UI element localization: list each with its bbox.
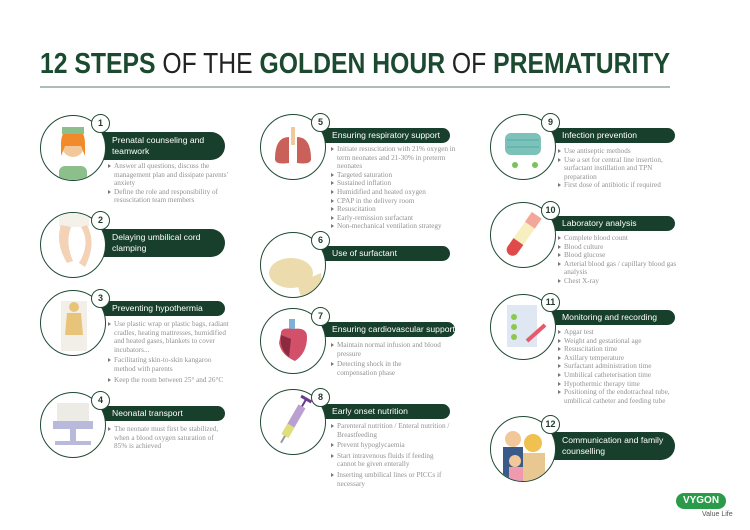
bullets 11: Surfactant administration time [564, 362, 651, 370]
bullets 9: Use antiseptic methods [564, 147, 631, 155]
badge 3: 3 [98, 293, 103, 303]
logo: VYGON [683, 495, 719, 506]
step 9 [490, 113, 675, 189]
bullets 5: CPAP in the delivery room [337, 197, 414, 205]
bullets 3: Facilitating skin-to-skin kangaroo method with parents [114, 356, 211, 373]
step 4 [40, 391, 225, 458]
icon: syringe [260, 389, 326, 455]
pill 8: Early onset nutrition [332, 406, 408, 416]
pill 2 [100, 229, 225, 257]
pill 4: Neonatal transport [112, 408, 183, 418]
badge 4: 4 [98, 395, 103, 405]
badge 6: 6 [318, 235, 323, 245]
badge 6 [311, 231, 330, 250]
step 10 [490, 201, 676, 285]
pill 9: Infection prevention [562, 130, 637, 140]
bullets 5: Early-remission surfactant [337, 214, 413, 222]
bullets 8: Inserting umbilical lines or PICCs if necessary [337, 471, 441, 488]
icon: baby in bag [40, 290, 106, 356]
icon: baby legs [40, 212, 106, 278]
logo [676, 493, 733, 518]
badge 7: 7 [318, 311, 323, 321]
bullets 7: Detecting shock in the compensation phase [337, 360, 401, 377]
step 1 [40, 114, 228, 204]
icon: mask [490, 114, 556, 180]
badge 10 [541, 201, 560, 220]
badge 3 [91, 289, 110, 308]
icon: incubator [40, 392, 106, 458]
badge 1: 1 [98, 118, 103, 128]
step 2 [40, 211, 225, 278]
badge 12: 12 [545, 419, 556, 429]
bullets 11: Umbilical catheterisation time [564, 371, 651, 379]
badge 12 [541, 415, 560, 434]
bullets 1: Define the role and responsibility of resuscitation team members [114, 188, 218, 204]
bullets 5: Sustained inflation [337, 179, 391, 187]
badge 9 [541, 113, 560, 132]
step 5 [260, 113, 456, 230]
logo: Value Life [702, 511, 733, 518]
bullets 8: Start intravenous fluids if feeding cannot be given enterally [337, 452, 434, 468]
icon: lungs [260, 114, 326, 180]
pill 4 [100, 406, 225, 421]
pill 1: Prenatal counseling and teamwork [112, 135, 204, 156]
step 7 [260, 307, 455, 377]
bullets 11: Apgar test [564, 328, 594, 336]
icon: blood tube [490, 202, 556, 268]
pill 12 [550, 432, 675, 460]
bullets 5: Initiate resuscitation with 21% oxygen in term neonates and 21-30% in preterm neonates [337, 145, 455, 170]
bullets 9 [558, 147, 663, 189]
bullets 5: Targeted saturation [337, 171, 392, 179]
bullets 7 [331, 341, 441, 377]
step 8 [260, 388, 450, 488]
pill 12: Communication and family counselling [562, 435, 663, 456]
badge 1 [91, 114, 110, 133]
pill 7: Ensuring cardiovascular support [332, 324, 455, 334]
bullets 11: Hypothermic therapy time [564, 380, 640, 388]
badge 2 [91, 211, 110, 230]
pill 5 [320, 128, 450, 143]
badge 8: 8 [318, 392, 323, 402]
badge 10: 10 [545, 205, 556, 215]
badge 2: 2 [98, 215, 103, 225]
bullets 7: Maintain normal infusion and blood pressure [337, 341, 441, 358]
icon: heart [260, 308, 326, 374]
bullets 3: Use plastic wrap or plastic bags, radiant cradles, heating mattresses, humidified and heated gases, blankets to cover incubators... [114, 320, 229, 354]
step 12 [490, 415, 675, 482]
bullets 10: Blood glucose [564, 251, 605, 259]
bullets 10 [558, 234, 676, 285]
bullets 10: Chest X-ray [564, 277, 599, 285]
icon: baby head [260, 232, 326, 298]
bullets 5: Non-mechanical ventilation strategy [337, 222, 442, 230]
badge 5 [311, 113, 330, 132]
pill 3: Preventing hypothermia [112, 303, 203, 313]
title: 12 STEPS OF THE GOLDEN HOUR OF PREMATURITY [40, 48, 670, 80]
icon: nurse [40, 115, 106, 181]
bullets 3: Keep the room between 25° and 26°C [114, 376, 223, 384]
bullets 5: Humidified and heated oxygen [337, 188, 426, 196]
pill 6 [320, 246, 450, 261]
pill 7 [320, 322, 455, 337]
bullets 10: Complete blood count [564, 234, 628, 242]
pill 5: Ensuring respiratory support [332, 130, 440, 140]
bullets 11: Resuscitation time [564, 345, 617, 353]
icon: checklist [490, 294, 556, 360]
badge 5: 5 [318, 117, 323, 127]
bullets 11 [558, 328, 670, 405]
step 6 [260, 231, 450, 298]
bullets 8: Prevent hypoglycaemia [337, 441, 405, 449]
bullets 10: Blood culture [564, 243, 603, 251]
icon: family [490, 416, 556, 482]
pill 10: Laboratory analysis [562, 218, 637, 228]
pill 2: Delaying umbilical cord clamping [112, 232, 200, 253]
pill 6: Use of surfactant [332, 248, 397, 258]
badge 11 [541, 293, 560, 312]
bullets 9: Use a set for central line insertion, surfactant instillation and TPN preparation [564, 156, 663, 181]
bullets 11: Positioning of the endotracheal tube, umbilical catheter and feeding tube [564, 388, 670, 405]
badge 11: 11 [546, 297, 555, 307]
badge 4 [91, 391, 110, 410]
bullets 8: Parenteral nutrition / Enteral nutrition / Breastfeeding [337, 422, 449, 439]
pill 1 [100, 132, 225, 160]
pill 11 [550, 310, 675, 325]
pill 11: Monitoring and recording [562, 312, 657, 322]
bullets 1 [108, 162, 228, 204]
step 11 [490, 293, 675, 405]
bullets 5 [331, 145, 456, 230]
bullets 11: Axillary temperature [564, 354, 624, 362]
step 3 [40, 289, 229, 384]
badge 8 [311, 388, 330, 407]
badge 7 [311, 307, 330, 326]
badge 9: 9 [548, 117, 553, 127]
bullets 8 [331, 422, 450, 488]
bullets 10: Arterial blood gas / capillary blood gas analysis [564, 260, 676, 276]
bullets 1: Answer all questions, discuss the management plan and dissipate parents' anxiety [114, 162, 228, 187]
bullets 3 [108, 320, 229, 384]
pill 3 [100, 301, 225, 316]
pill 9 [550, 128, 675, 143]
pill 10 [550, 216, 675, 231]
bullets 9: First dose of antibiotic if required [564, 181, 661, 189]
pill 8 [320, 404, 450, 419]
bullets 11: Weight and gestational age [564, 337, 641, 345]
bullets 5: Resuscitation [337, 205, 376, 213]
bullets 4: The neonate must first be stabilized, when a blood oxygen saturation of 85% is achieved [114, 425, 218, 450]
